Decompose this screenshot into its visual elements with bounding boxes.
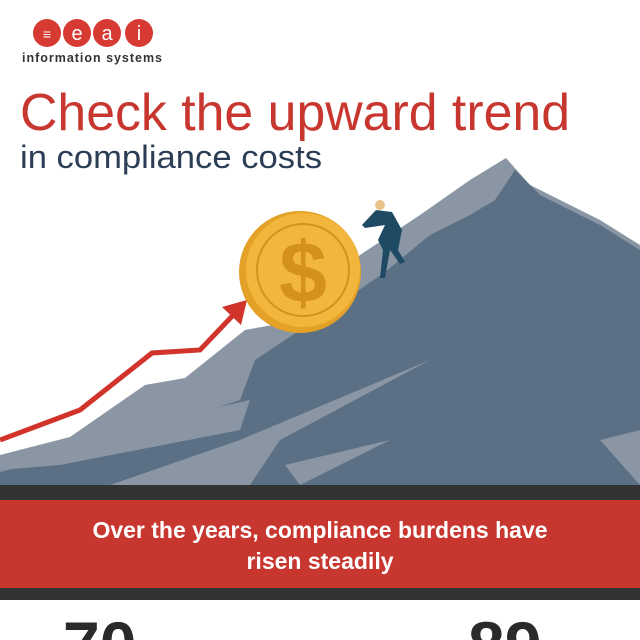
subtitle: in compliance costs: [20, 139, 322, 175]
band: headline: Over the years, compliance burdens have: [92, 517, 548, 543]
mountain: [0, 158, 640, 485]
man pushing: [362, 200, 405, 278]
logo: e: [71, 23, 83, 45]
logo: information systems: [22, 51, 162, 65]
coin: $: [279, 225, 327, 321]
logo: a: [101, 23, 113, 45]
band: headline: [0, 485, 640, 600]
title: Check the upward trend: [20, 84, 570, 142]
band: headline: risen steadily: [246, 548, 394, 574]
coin: [239, 211, 361, 333]
logo: [22, 19, 162, 65]
logo: i: [137, 23, 141, 45]
arrow: [0, 300, 247, 440]
logo: ≡: [43, 26, 51, 42]
